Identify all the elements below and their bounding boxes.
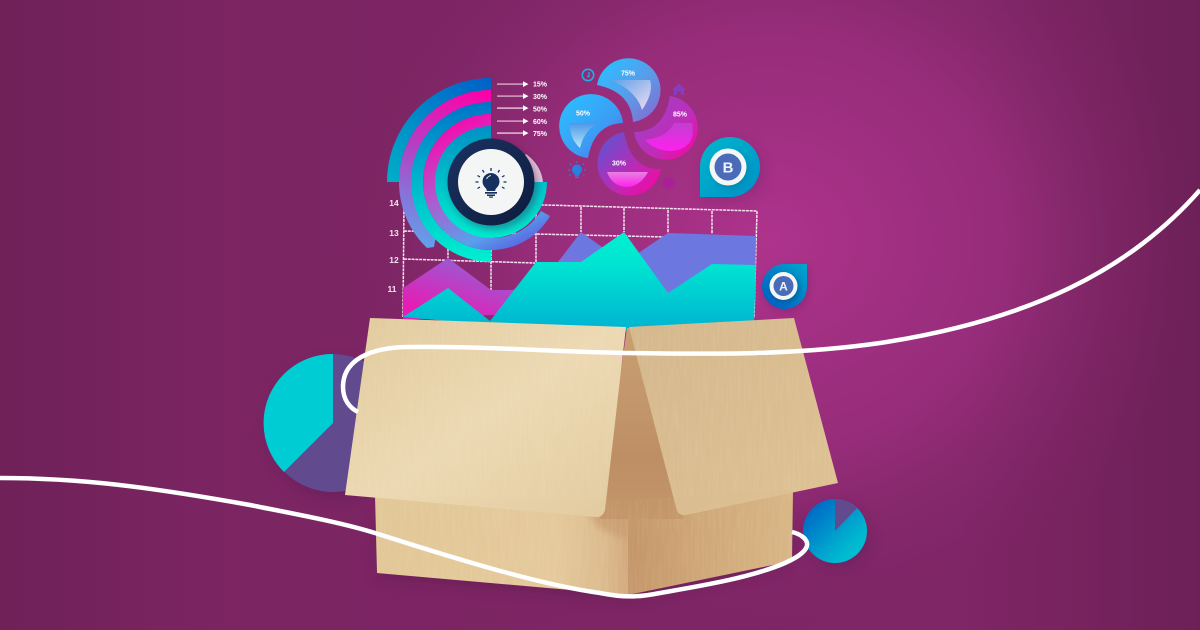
soft shading below the left flap (588, 516, 626, 537)
icon: small lightbulb (568, 161, 586, 178)
petal 75%: 75% (621, 70, 636, 78)
box front-right face (628, 480, 793, 595)
arrow legend with percentages: 50% (533, 106, 548, 114)
line chart grid with axis labels (388, 198, 757, 318)
small pie chart (803, 499, 870, 568)
map pin B (700, 137, 763, 201)
area chart: teal front series (403, 232, 756, 332)
white curve: upper (343, 190, 1200, 412)
radial ring chart (387, 78, 550, 262)
right flap (629, 318, 838, 515)
arrow legend with percentages: 30% (533, 94, 548, 101)
lightbulb badge (448, 138, 538, 230)
line chart grid with axis labels: 11 (388, 284, 397, 294)
petal 50%: 50% (576, 110, 591, 118)
line chart grid with axis labels: 14 (389, 198, 399, 208)
icon: gear (662, 177, 674, 189)
petal chart (559, 58, 698, 196)
cardboard box (345, 318, 838, 601)
icon: house (672, 84, 686, 95)
corrugation texture (345, 318, 838, 595)
white curve: lower (0, 478, 807, 596)
arrow legend with percentages: 15% (533, 82, 548, 88)
box front-left face (375, 480, 628, 595)
box inner corner (600, 328, 684, 519)
map pin A: A (779, 280, 788, 294)
line chart grid with axis labels: 13 (389, 228, 399, 238)
petal 30%: 30% (612, 160, 627, 168)
arrow legend with percentages (497, 81, 548, 138)
area chart: purple back series (403, 232, 756, 320)
icon: clock (582, 69, 594, 81)
arrow legend with percentages: 60% (533, 119, 548, 126)
large pie chart (264, 354, 406, 499)
line chart grid with axis labels: 12 (389, 255, 399, 265)
map pin B: B (723, 160, 734, 176)
map pin A (762, 264, 809, 312)
left flap (345, 318, 626, 517)
petal 85%: 85% (673, 112, 688, 118)
arrow legend with percentages: 75% (533, 131, 548, 138)
